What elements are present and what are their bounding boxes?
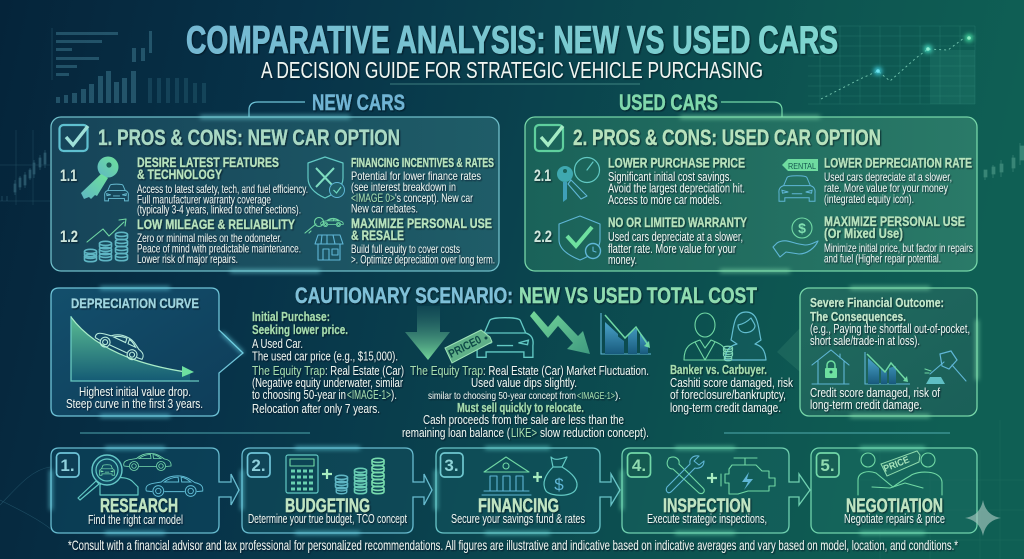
item: maximize personal use and resale <box>351 216 495 266</box>
heading: new cars <box>249 90 405 117</box>
number badge <box>440 453 463 477</box>
panel heading: Severe Financial Outcome: <box>810 295 944 310</box>
icon: falling zigzag arrow <box>530 311 590 354</box>
item 2.2: NO OR LIMITED WARRANTY <box>608 215 747 230</box>
icon: key and car <box>81 156 128 201</box>
step label: BUDGETING <box>285 495 370 517</box>
item: lower depreciation rate <box>824 156 972 206</box>
icon: car with price tag: PRICE0 <box>447 334 484 361</box>
text block: initial purchase: Initial Purchase: <box>252 309 330 324</box>
text block: banker vs carbuyer: Banker vs. Carbuyer. <box>670 362 767 377</box>
icon: shield with tools <box>308 157 344 198</box>
heading: cautionary scenario <box>295 283 757 308</box>
decorative wave: bottom left <box>0 467 52 530</box>
icon: car key and store <box>305 218 343 260</box>
text block: banker vs carbuyer: long-term credit damage. <box>670 400 781 415</box>
caption: Highest initial value drop. <box>79 384 191 399</box>
item: maximize personal use or mixed use <box>824 214 973 266</box>
item: maximize personal use or mixed use: (Or Mixed Use) <box>824 226 903 241</box>
step label: Negotiate repairs & price <box>844 511 945 526</box>
decorative title rule <box>390 83 640 85</box>
number badge <box>628 453 650 477</box>
item 1.1 <box>60 155 308 216</box>
decorative dividers <box>80 432 950 434</box>
number badge: 3. <box>444 456 459 475</box>
step label <box>451 495 585 526</box>
step 1: research <box>51 448 239 533</box>
subtitle: A DECISION GUIDE FOR STRATEGIC VEHICLE PURCHASING <box>261 57 763 83</box>
text block: banker vs carbuyer: of foreclosure/bankruptcy, <box>670 387 786 402</box>
step label <box>248 495 407 526</box>
item 2.1: Access to more car models. <box>608 193 722 207</box>
panel heading: short sale/trade-in at loss). <box>810 334 920 348</box>
step label <box>88 495 183 527</box>
icon: hand with dollar: $ <box>798 220 806 236</box>
text block: initial purchase: ). <box>391 387 397 402</box>
text block: initial purchase: <IMAGE-1> <box>347 387 391 402</box>
item 1.2: Lower risk of major repairs. <box>137 252 238 266</box>
icon: keys and gauge <box>557 158 600 202</box>
caption <box>810 385 940 412</box>
decorative chart: top-left data bars <box>52 28 206 103</box>
item: lower depreciation rate: LOWER DEPRECIATION RATE <box>824 156 972 170</box>
item 2.2: money. <box>608 253 637 267</box>
text block: equity trap: Cash proceeds from the sale are less than the <box>423 412 624 427</box>
text block: initial purchase: The Equity Trap <box>252 363 325 378</box>
text block: equity trap <box>402 363 649 440</box>
item: maximize personal use and resale: Build full equity to cover costs <box>351 242 460 256</box>
item 1.2: 1.2 <box>60 228 78 246</box>
item 2.1 <box>534 156 745 207</box>
text block: banker vs carbuyer: Cashiti score damaged, risk <box>670 375 793 390</box>
text block: equity trap: The Equity Trap <box>410 363 483 378</box>
icon: checkbox <box>535 125 563 151</box>
item 1.1: Full manufacturer warranty coverage <box>137 192 271 206</box>
text block: equity trap: Used value dips slightly. <box>471 375 577 390</box>
text block: initial purchase: to choosing 50-year in <box>252 387 346 402</box>
icon: checkbox <box>60 125 88 151</box>
step 3: financing <box>436 448 620 533</box>
item 2.1: Significant initial cost savings. <box>608 170 732 184</box>
item 1.1: & TECHNOLOGY <box>137 167 222 182</box>
step label: RESEARCH <box>100 495 178 517</box>
number badge <box>56 453 79 477</box>
icon: sparkle watermark <box>965 500 1001 536</box>
number badge: 1. <box>60 456 75 475</box>
text block: initial purchase: Seeking lower price. <box>252 322 348 337</box>
text block: initial purchase: Relocation after only 7 years. <box>252 401 380 416</box>
step label: Find the right car model <box>88 512 183 527</box>
caption: long-term credit damage. <box>810 397 922 412</box>
item 1.2: Peace of mind with predictable maintenance. <box>137 242 301 256</box>
item: maximize personal use or mixed use: MAXIMIZE PERSONAL USE <box>824 214 965 229</box>
icon: house with lock <box>812 350 849 384</box>
item 1.1: DESIRE LATEST FEATURES <box>137 155 279 170</box>
panel heading: (e.g., Paying the shortfall out-of-pocket, <box>810 322 970 336</box>
text block: equity trap: <IMAGE-1> <box>577 390 615 402</box>
heading: new cars: NEW CARS <box>312 90 405 115</box>
step label: INSPECTION <box>663 495 751 517</box>
text block: equity trap: remaining loan balance ( <box>402 425 511 440</box>
icon: calculator and coins <box>286 455 384 494</box>
icon: down arrow <box>405 306 450 360</box>
panel: new car pros and cons <box>51 117 499 271</box>
item: maximize personal use and resale: & RESALE <box>351 228 404 243</box>
icon: rental tag and car: RENTAL <box>788 161 816 171</box>
item 1.1: (typically 3-4 years, linked to other sections). <box>137 202 301 216</box>
icon: bank and money bag <box>482 457 577 495</box>
step label: Determine your true budget, TCO concept <box>248 511 407 526</box>
item 2.1: Avoid the largest depreciation hit. <box>608 182 745 196</box>
item: financing incentives: FINANCING INCENTIVES & RATES <box>351 155 494 170</box>
step 4: inspection <box>622 448 810 533</box>
item: financing incentives: 's concept). New car <box>395 191 473 205</box>
item 1.1: 1.1 <box>60 167 77 185</box>
panel heading <box>810 295 970 348</box>
item: maximize personal use and resale: >. Optimize depreciation over long term. <box>351 252 495 266</box>
icon: crossed wrenches and engine <box>666 456 775 494</box>
icon: hand with dollar <box>773 218 818 257</box>
item 2.2: flatter rate. More value for your <box>608 242 736 256</box>
item 2.1: 2.1 <box>534 167 551 185</box>
panel heading: 2. PROS & CONS: USED CAR OPTION <box>573 125 881 150</box>
item 2.2: Used cars depreciate at a slower, <box>608 230 743 244</box>
text block: initial purchase: The used car price (e.g., $15,000). <box>252 348 398 364</box>
text block: initial purchase: : Real Estate (Car) <box>325 363 404 378</box>
caption: Steep curve in the first 3 years. <box>66 396 203 411</box>
text block: initial purchase <box>252 309 404 416</box>
step label: Secure your savings fund & rates <box>451 511 585 526</box>
item 1.2: LOW MILEAGE & RELIABILITY <box>137 217 295 232</box>
item: financing incentives: <IMAGE 0> <box>351 191 395 205</box>
item 1.1: Access to latest safety, tech, and fuel efficiency. <box>137 182 308 196</box>
icon: rental tag and car <box>779 159 818 201</box>
panel: depreciation curve <box>51 288 243 416</box>
item: financing incentives: New car rebates. <box>351 202 418 216</box>
number badge: 2. <box>251 456 266 475</box>
number badge: 4. <box>632 456 646 475</box>
decorative chart: right candlesticks <box>984 143 1024 180</box>
text block: equity trap: : Real Estate (Car) Market Fluctuation. <box>483 363 649 378</box>
step label: Execute strategic inspections, <box>647 511 767 526</box>
icon: handshake with price tag: PRICE <box>882 454 911 475</box>
step label: FINANCING <box>478 495 559 517</box>
item: lower depreciation rate: rate. More value for your money <box>824 181 948 195</box>
text block: initial purchase: (Negative equity underwater, similar <box>252 375 403 390</box>
icon: gavel <box>925 351 966 384</box>
heading: used cars: USED CARS <box>619 90 718 115</box>
item: financing incentives: Potential for lower finance rates <box>351 169 481 183</box>
caption <box>66 384 203 411</box>
item: maximize personal use and resale: MAXIMIZE PERSONAL USE <box>351 216 492 231</box>
heading: cautionary scenario: NEW VS USED TOTAL COST <box>519 283 757 308</box>
panel: severe financial outcome <box>777 288 977 416</box>
text block: equity trap: slow reduction concept). <box>540 425 649 440</box>
item 2.2 <box>534 215 747 267</box>
item 2.2: 2.2 <box>534 228 552 246</box>
item: financing incentives <box>351 155 494 216</box>
step 2: budgeting <box>242 448 432 533</box>
step label <box>647 495 767 526</box>
item: financing incentives: (see interest breakdown in <box>351 180 456 194</box>
text block: equity trap: LIKE> <box>511 425 537 440</box>
panel heading: DEPRECIATION CURVE <box>71 295 199 311</box>
item 1.2: Zero or minimal miles on the odometer. <box>137 231 282 245</box>
icon: falling bar chart <box>601 313 651 354</box>
text block: banker vs carbuyer <box>670 362 793 415</box>
icon: banker and car buyer <box>684 312 766 361</box>
text block: equity trap: ). <box>615 390 621 402</box>
icon: magnifier and cars <box>78 453 203 500</box>
caption: Credit score damaged, risk of <box>810 385 940 400</box>
text block: initial purchase: A Used Car. <box>252 336 303 351</box>
panel heading: 1. PROS & CONS: NEW CAR OPTION <box>98 125 400 150</box>
step 5: negotiation <box>811 448 977 533</box>
step label: NEGOTIATION <box>846 495 943 517</box>
icon: shield and clock <box>559 216 600 260</box>
item: maximize personal use or mixed use: and fuel (Higher repair potential. <box>824 252 941 266</box>
item: lower depreciation rate: (integrated equity icon). <box>824 192 914 206</box>
text block: equity trap: Must sell quickly to relocate. <box>457 400 584 415</box>
icon: handshake with price tag <box>858 451 942 495</box>
panel heading: The Consequences. <box>810 309 906 324</box>
number badge <box>248 453 270 477</box>
decorative chart: top-right line graph <box>808 26 975 104</box>
chart: depreciation curve <box>71 316 199 381</box>
item 2.1: LOWER PURCHASE PRICE <box>608 156 745 170</box>
item 1.2 <box>60 217 301 266</box>
decorative grid: bottom right <box>860 420 1024 559</box>
text block: equity trap: similar to choosing 50-year concept from <box>428 390 576 402</box>
icon: car with price tag <box>445 318 533 363</box>
decorative chart: left candlesticks <box>0 130 50 205</box>
step label <box>844 495 945 526</box>
panel: used car pros and cons <box>525 117 977 271</box>
heading: cautionary scenario: CAUTIONARY SCENARIO: <box>295 283 513 308</box>
item: lower depreciation rate: Used cars depreciate at a slower, <box>824 170 952 184</box>
number badge <box>816 453 839 477</box>
icon: coins and rising arrow <box>84 219 128 262</box>
icon: bank and money bag: $ <box>554 475 564 494</box>
number badge: 5. <box>820 456 835 475</box>
icon: falling bar chart <box>865 352 910 384</box>
